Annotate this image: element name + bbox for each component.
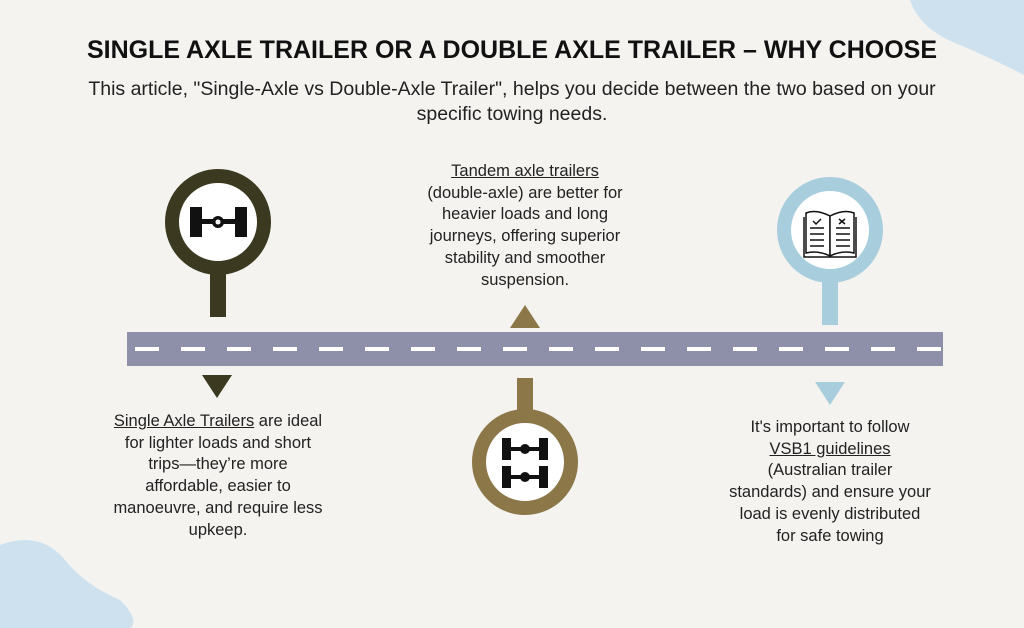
text: guidelines: (Australian trailer [768, 461, 892, 479]
text: single axle: for lighter loads and short [125, 434, 311, 452]
text: guidelines: It's important to follow [750, 418, 910, 436]
text: guidelines: VSB1 guidelines [769, 440, 891, 458]
road [127, 332, 943, 366]
arrow: down right [815, 382, 845, 405]
text: tandem: journeys, offering superior [430, 227, 620, 245]
text: tandem: Tandem axle trailers [451, 162, 599, 180]
text: single axle: trips—they’re more [148, 455, 288, 473]
text: tandem [427, 162, 623, 289]
arrow: up middle [510, 305, 540, 328]
arrow: down left [202, 375, 232, 398]
text: single axle: Single Axle Trailers are ideal [114, 412, 322, 430]
subtitle: This article, "Single-Axle vs Double-Axle Trailer", helps you decide between the two based on your [88, 78, 936, 100]
text: tandem: heavier loads and long [442, 205, 608, 223]
text: guidelines: standards) and ensure your [729, 483, 931, 501]
text: single axle: affordable, easier to [145, 477, 291, 495]
icon: double axle [502, 438, 548, 488]
text: guidelines: for safe towing [776, 527, 884, 545]
text: single axle: upkeep. [189, 521, 247, 539]
text: guidelines: load is evenly distributed [740, 505, 920, 523]
subtitle: specific towing needs. [417, 103, 607, 125]
text: tandem: (double-axle) are better for [427, 184, 623, 202]
icon: single axle [190, 207, 247, 237]
text: single axle [113, 412, 323, 539]
text: guidelines [729, 418, 931, 545]
pin: double axle [472, 378, 578, 515]
icon: book [804, 212, 856, 257]
subtitle [88, 78, 936, 125]
text: tandem: suspension. [481, 271, 569, 289]
text: tandem: stability and smoother [445, 249, 605, 267]
blob: top right [910, 0, 1024, 75]
title: SINGLE AXLE TRAILER OR A DOUBLE AXLE TRAILER – WHY CHOOSE [87, 36, 937, 64]
pin: guidelines [777, 177, 883, 325]
blob: bottom left [0, 540, 134, 628]
pin: single axle [165, 169, 271, 317]
text: single axle: manoeuvre, and require less [113, 499, 323, 517]
